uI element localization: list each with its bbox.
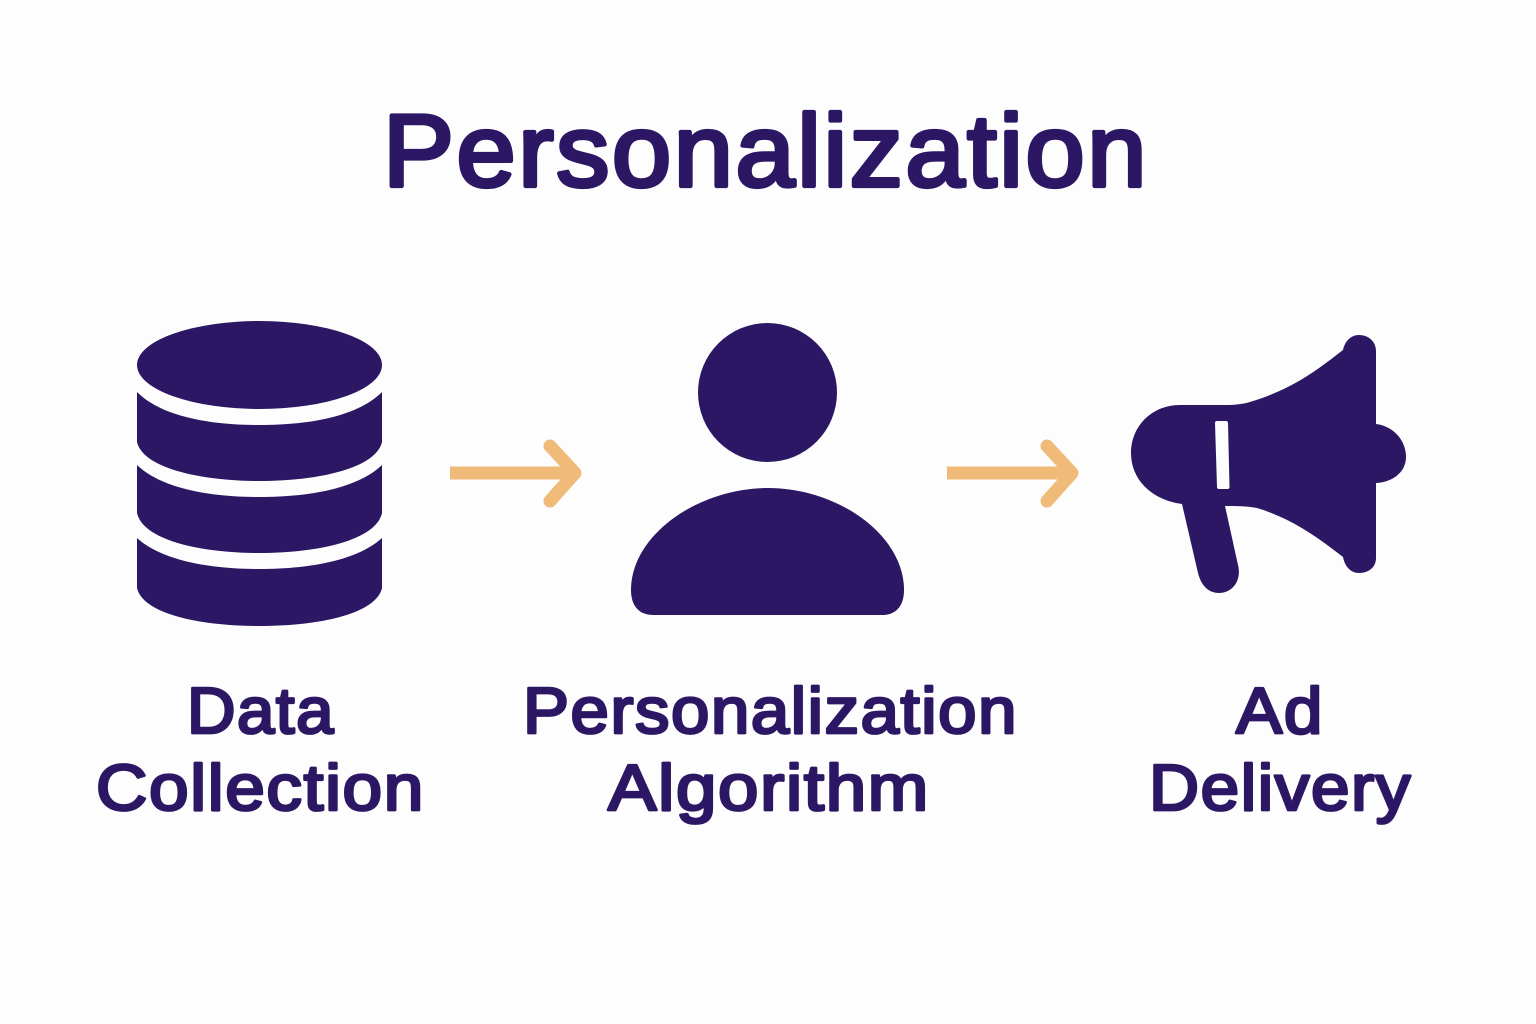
icon: person	[631, 323, 904, 615]
label: ad delivery	[1149, 674, 1412, 824]
label: ad delivery: Delivery	[1149, 751, 1412, 824]
label: data collection: Data	[187, 674, 335, 747]
label: data collection	[96, 674, 425, 824]
label: ad delivery: Ad	[1236, 674, 1324, 747]
arrow: algorithm to delivery	[947, 446, 1072, 501]
arrow: data to algorithm	[450, 446, 575, 501]
label: data collection: Collection	[96, 751, 425, 824]
label: personalization algorithm: Personalization	[523, 674, 1018, 747]
title: Personalization	[383, 94, 1149, 208]
icon: megaphone	[1131, 335, 1406, 593]
icon: database	[137, 321, 382, 626]
label: personalization algorithm: Algorithm	[608, 751, 930, 824]
label: personalization algorithm	[523, 674, 1018, 824]
slit	[1215, 421, 1230, 489]
